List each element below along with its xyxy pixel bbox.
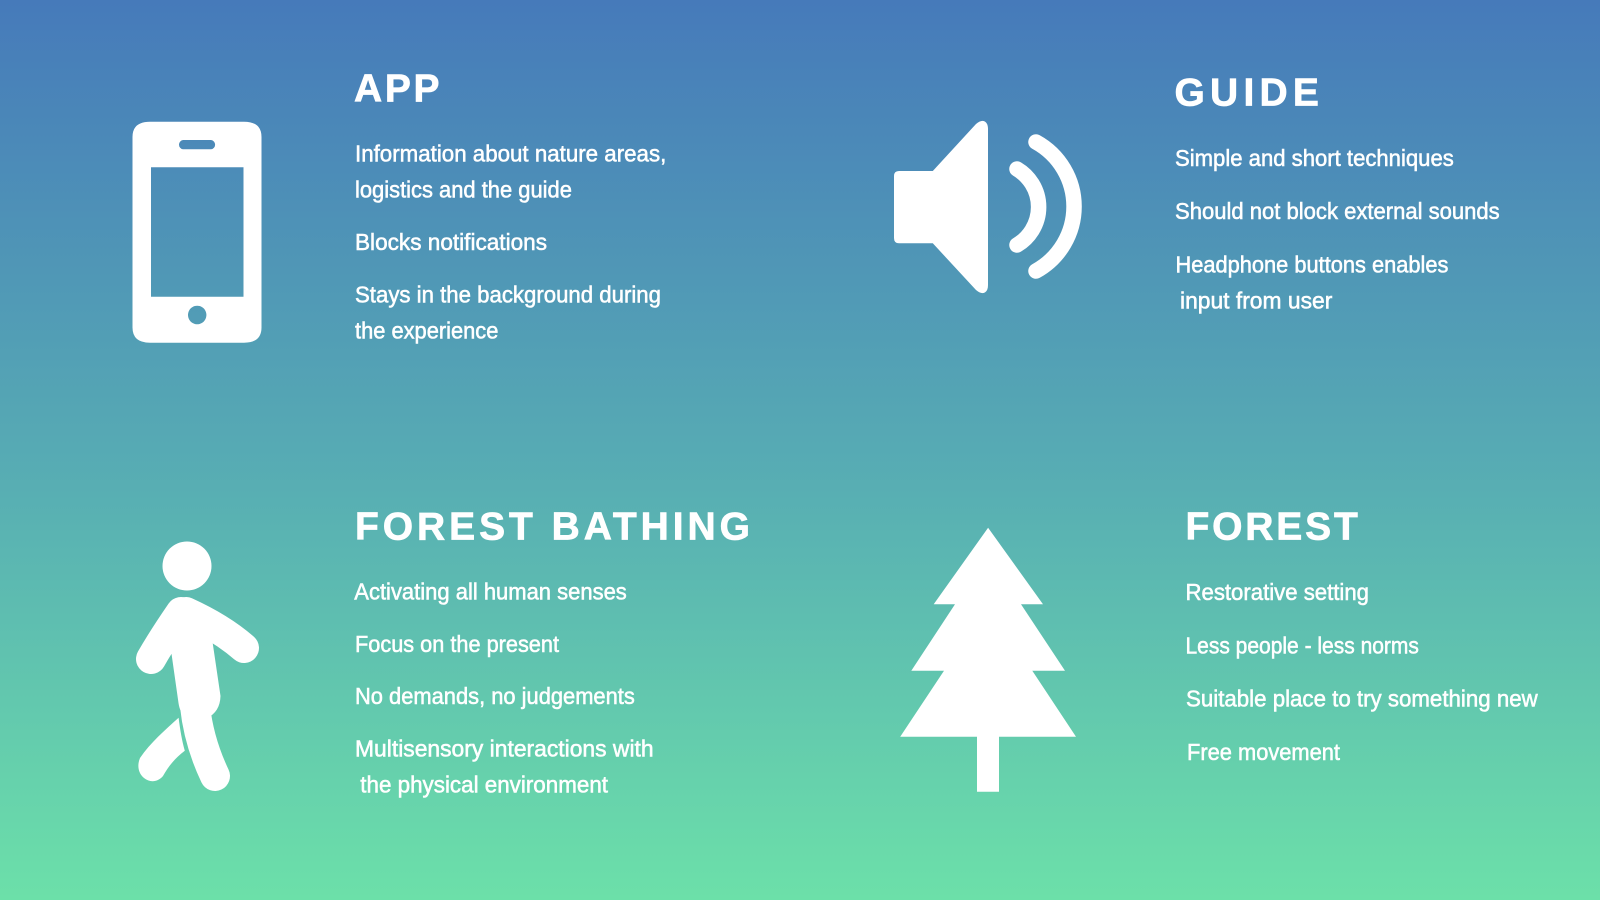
- icon: pine tree: [900, 528, 1076, 792]
- text: guide details: Headphone buttons enables: [1176, 251, 1448, 277]
- text: app details: Stays in the background during: [355, 282, 661, 308]
- text: guide details: input from user: [1180, 287, 1332, 313]
- text: forest details: Suitable place to try something new: [1186, 686, 1539, 712]
- panel: guide: [894, 72, 1500, 313]
- text: forest details: Less people - less norms: [1186, 632, 1419, 658]
- icon: walking person: [138, 542, 244, 781]
- text: forest bathing details: Multisensory interactions with: [355, 736, 654, 762]
- text: forest details: [1186, 579, 1539, 765]
- icon: speaker with sound waves: [894, 121, 1074, 293]
- text: app details: logistics and the guide: [355, 177, 572, 203]
- heading: forest bathing: FOREST BATHING: [355, 506, 750, 548]
- text: app details: Blocks notifications: [355, 229, 547, 255]
- heading: forest: FOREST: [1186, 506, 1358, 548]
- text: guide details: [1175, 145, 1500, 313]
- text: forest bathing details: Activating all human senses: [354, 578, 627, 604]
- panel: app: [132, 68, 666, 343]
- panel: forest: [900, 506, 1539, 792]
- text: forest bathing details: Focus on the present: [355, 631, 559, 657]
- text: forest details: Restorative setting: [1186, 579, 1369, 605]
- text: app details: the experience: [355, 317, 498, 343]
- text: guide details: Should not block external sounds: [1175, 198, 1500, 224]
- text: app details: [355, 140, 666, 343]
- text: forest bathing details: the physical environment: [360, 772, 608, 798]
- panel: forest bathing: [138, 506, 750, 798]
- text: forest bathing details: No demands, no judgements: [355, 683, 635, 709]
- heading: app: APP: [354, 68, 440, 110]
- text: guide details: Simple and short techniques: [1175, 145, 1454, 171]
- icon: smartphone: [132, 122, 262, 343]
- heading: guide: GUIDE: [1174, 72, 1319, 115]
- text: forest bathing details: [354, 578, 654, 798]
- text: app details: Information about nature areas,: [355, 140, 666, 166]
- text: forest details: Free movement: [1187, 739, 1340, 765]
